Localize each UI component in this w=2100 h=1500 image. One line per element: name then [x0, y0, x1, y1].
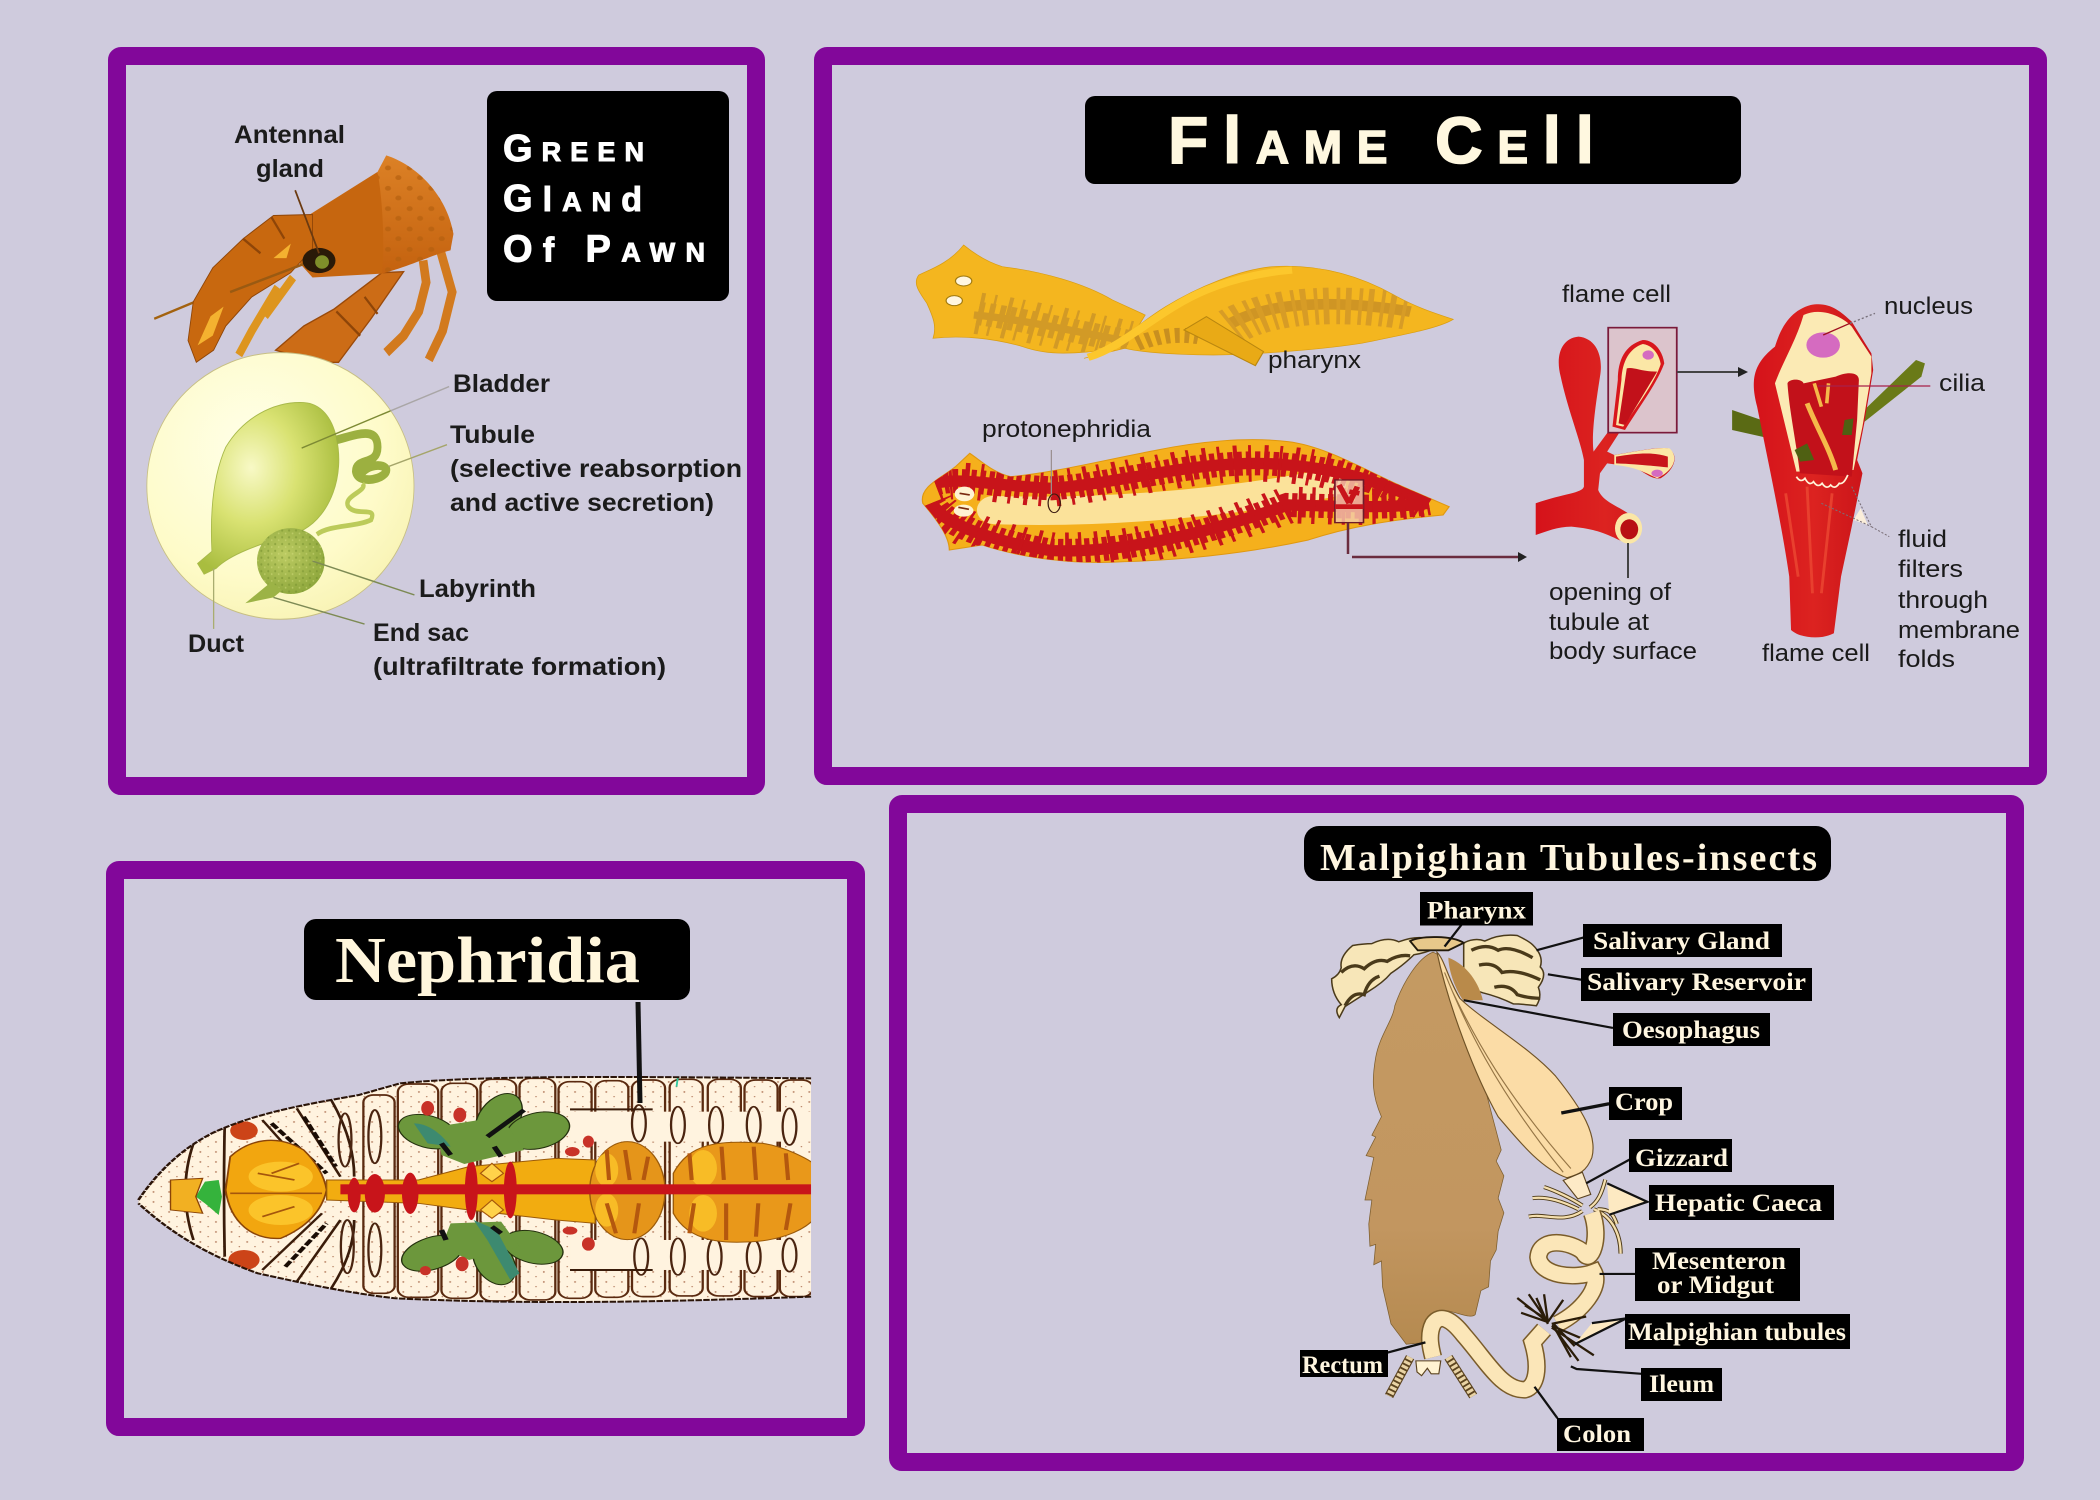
label: mesenteron or midgut: Mesenteron: [1652, 1248, 1786, 1275]
icon: branching tubule with flame cells: [1536, 328, 1677, 544]
label: hepatic caeca: Hepatic Caeca: [1655, 1190, 1823, 1217]
label: mesenteron or midgut: [1635, 1248, 1800, 1301]
label: tubule: Tubule: [450, 421, 535, 449]
label: salivary reservoir: Salivary Reservoir: [1587, 969, 1806, 996]
label: fluid filters through membrane folds: folds: [1898, 646, 1955, 673]
label: end sac: (ultrafiltrate formation): [373, 653, 666, 681]
label: malpighian tubules: Malpighian tubules: [1628, 1319, 1846, 1346]
icon: planarian with protonephridia network: [922, 440, 1449, 562]
leader lines: gland labels: [214, 387, 449, 629]
arrow: enlargement of flame cell: [1677, 367, 1748, 377]
label: colon: [1557, 1418, 1644, 1451]
label: flame cell upper: flame cell: [1562, 281, 1671, 308]
label: flame cell lower: flame cell: [1762, 640, 1870, 667]
label: pharynx: Pharynx: [1427, 898, 1527, 924]
icon: planarian body with digestive branches: [916, 245, 1453, 366]
label: ileum: Ileum: [1649, 1371, 1714, 1398]
label: fluid filters through membrane folds: through: [1898, 587, 1988, 614]
arrow: nephridia pointer: [638, 1002, 640, 1103]
label: fluid filters through membrane folds: fluid: [1898, 526, 1947, 553]
panel: nephridia: [115, 870, 856, 1427]
label: hepatic caeca: [1649, 1185, 1834, 1220]
label: pharynx: [1420, 892, 1533, 926]
title: flame cell: [1085, 96, 1741, 184]
leader lines: insect labels: [1387, 924, 1647, 1418]
icon: enlarged flame cell: [1732, 304, 1930, 637]
title: flame cell: Flame Cell: [1168, 103, 1594, 177]
label: opening of tubule at body surface: tubule at: [1549, 609, 1649, 636]
label: oesophagus: [1613, 1013, 1770, 1046]
label: antennal gland: gland: [256, 155, 324, 183]
panel: green gland of prawn: [117, 56, 756, 786]
label: end sac: [373, 619, 666, 681]
label: gizzard: Gizzard: [1635, 1145, 1728, 1172]
label: cilia: cilia: [1939, 370, 1986, 397]
label: crop: Crop: [1615, 1089, 1673, 1116]
title: nephridia: [304, 919, 690, 1000]
label: tubule: and active secretion): [450, 489, 714, 517]
label: ileum: [1641, 1368, 1722, 1401]
title: malpighian tubules-insects: Malpighian Tubules-insects: [1320, 837, 1817, 879]
label: colon: Colon: [1563, 1421, 1631, 1448]
title: nephridia: Nephridia: [335, 924, 640, 997]
label: fluid filters through membrane folds: filters: [1898, 556, 1963, 583]
label: gizzard: [1629, 1139, 1732, 1172]
label: salivary gland: Salivary Gland: [1593, 928, 1770, 955]
title: green gland of pawn: O f Pawn: [503, 228, 705, 270]
label: end sac: End sac: [373, 619, 469, 647]
icon: prawn illustration: [154, 155, 453, 362]
title: green gland of pawn: G l an d: [503, 178, 642, 220]
label: pharynx: pharynx: [1268, 347, 1361, 374]
title: green gland of pawn: Green: [503, 128, 644, 170]
label: tubule: (selective reabsorption: [450, 455, 742, 483]
panel: malpighian tubules: [898, 804, 2015, 1462]
label: opening of tubule at body surface: body surface: [1549, 638, 1697, 665]
label: fluid filters through membrane folds: membrane: [1898, 617, 2020, 644]
icon: gland cross-section: [147, 353, 414, 619]
label: salivary gland: [1583, 924, 1782, 957]
label: antennal gland: [234, 121, 345, 183]
arrow: tubule opening pointer: [1627, 543, 1629, 578]
label: crop: [1609, 1087, 1682, 1120]
label: tubule: [450, 421, 742, 517]
title: green gland of pawn: [487, 91, 729, 301]
label: opening of tubule at body surface: [1549, 579, 1697, 665]
label: labyrinth: Labyrinth: [419, 575, 536, 603]
label: bladder: Bladder: [453, 370, 550, 398]
icon: earthworm dissection: [137, 1076, 812, 1303]
label: duct: Duct: [188, 630, 245, 658]
panel: flame cell: [823, 56, 2038, 776]
label: antennal gland: Antennal: [234, 121, 345, 149]
label: oesophagus: Oesophagus: [1622, 1017, 1760, 1044]
label: protonephridia: protonephridia: [982, 416, 1152, 443]
icon: insect digestive system: [1332, 935, 1621, 1396]
label: opening of tubule at body surface: opening of: [1549, 579, 1671, 606]
label: mesenteron or midgut: or Midgut: [1657, 1272, 1775, 1299]
label: rectum: Rectum: [1302, 1352, 1383, 1379]
label: nucleus: nucleus: [1884, 293, 1973, 320]
arrow: from planarian to tubule: [1348, 523, 1527, 562]
label: fluid filters through membrane folds: [1898, 526, 2020, 673]
